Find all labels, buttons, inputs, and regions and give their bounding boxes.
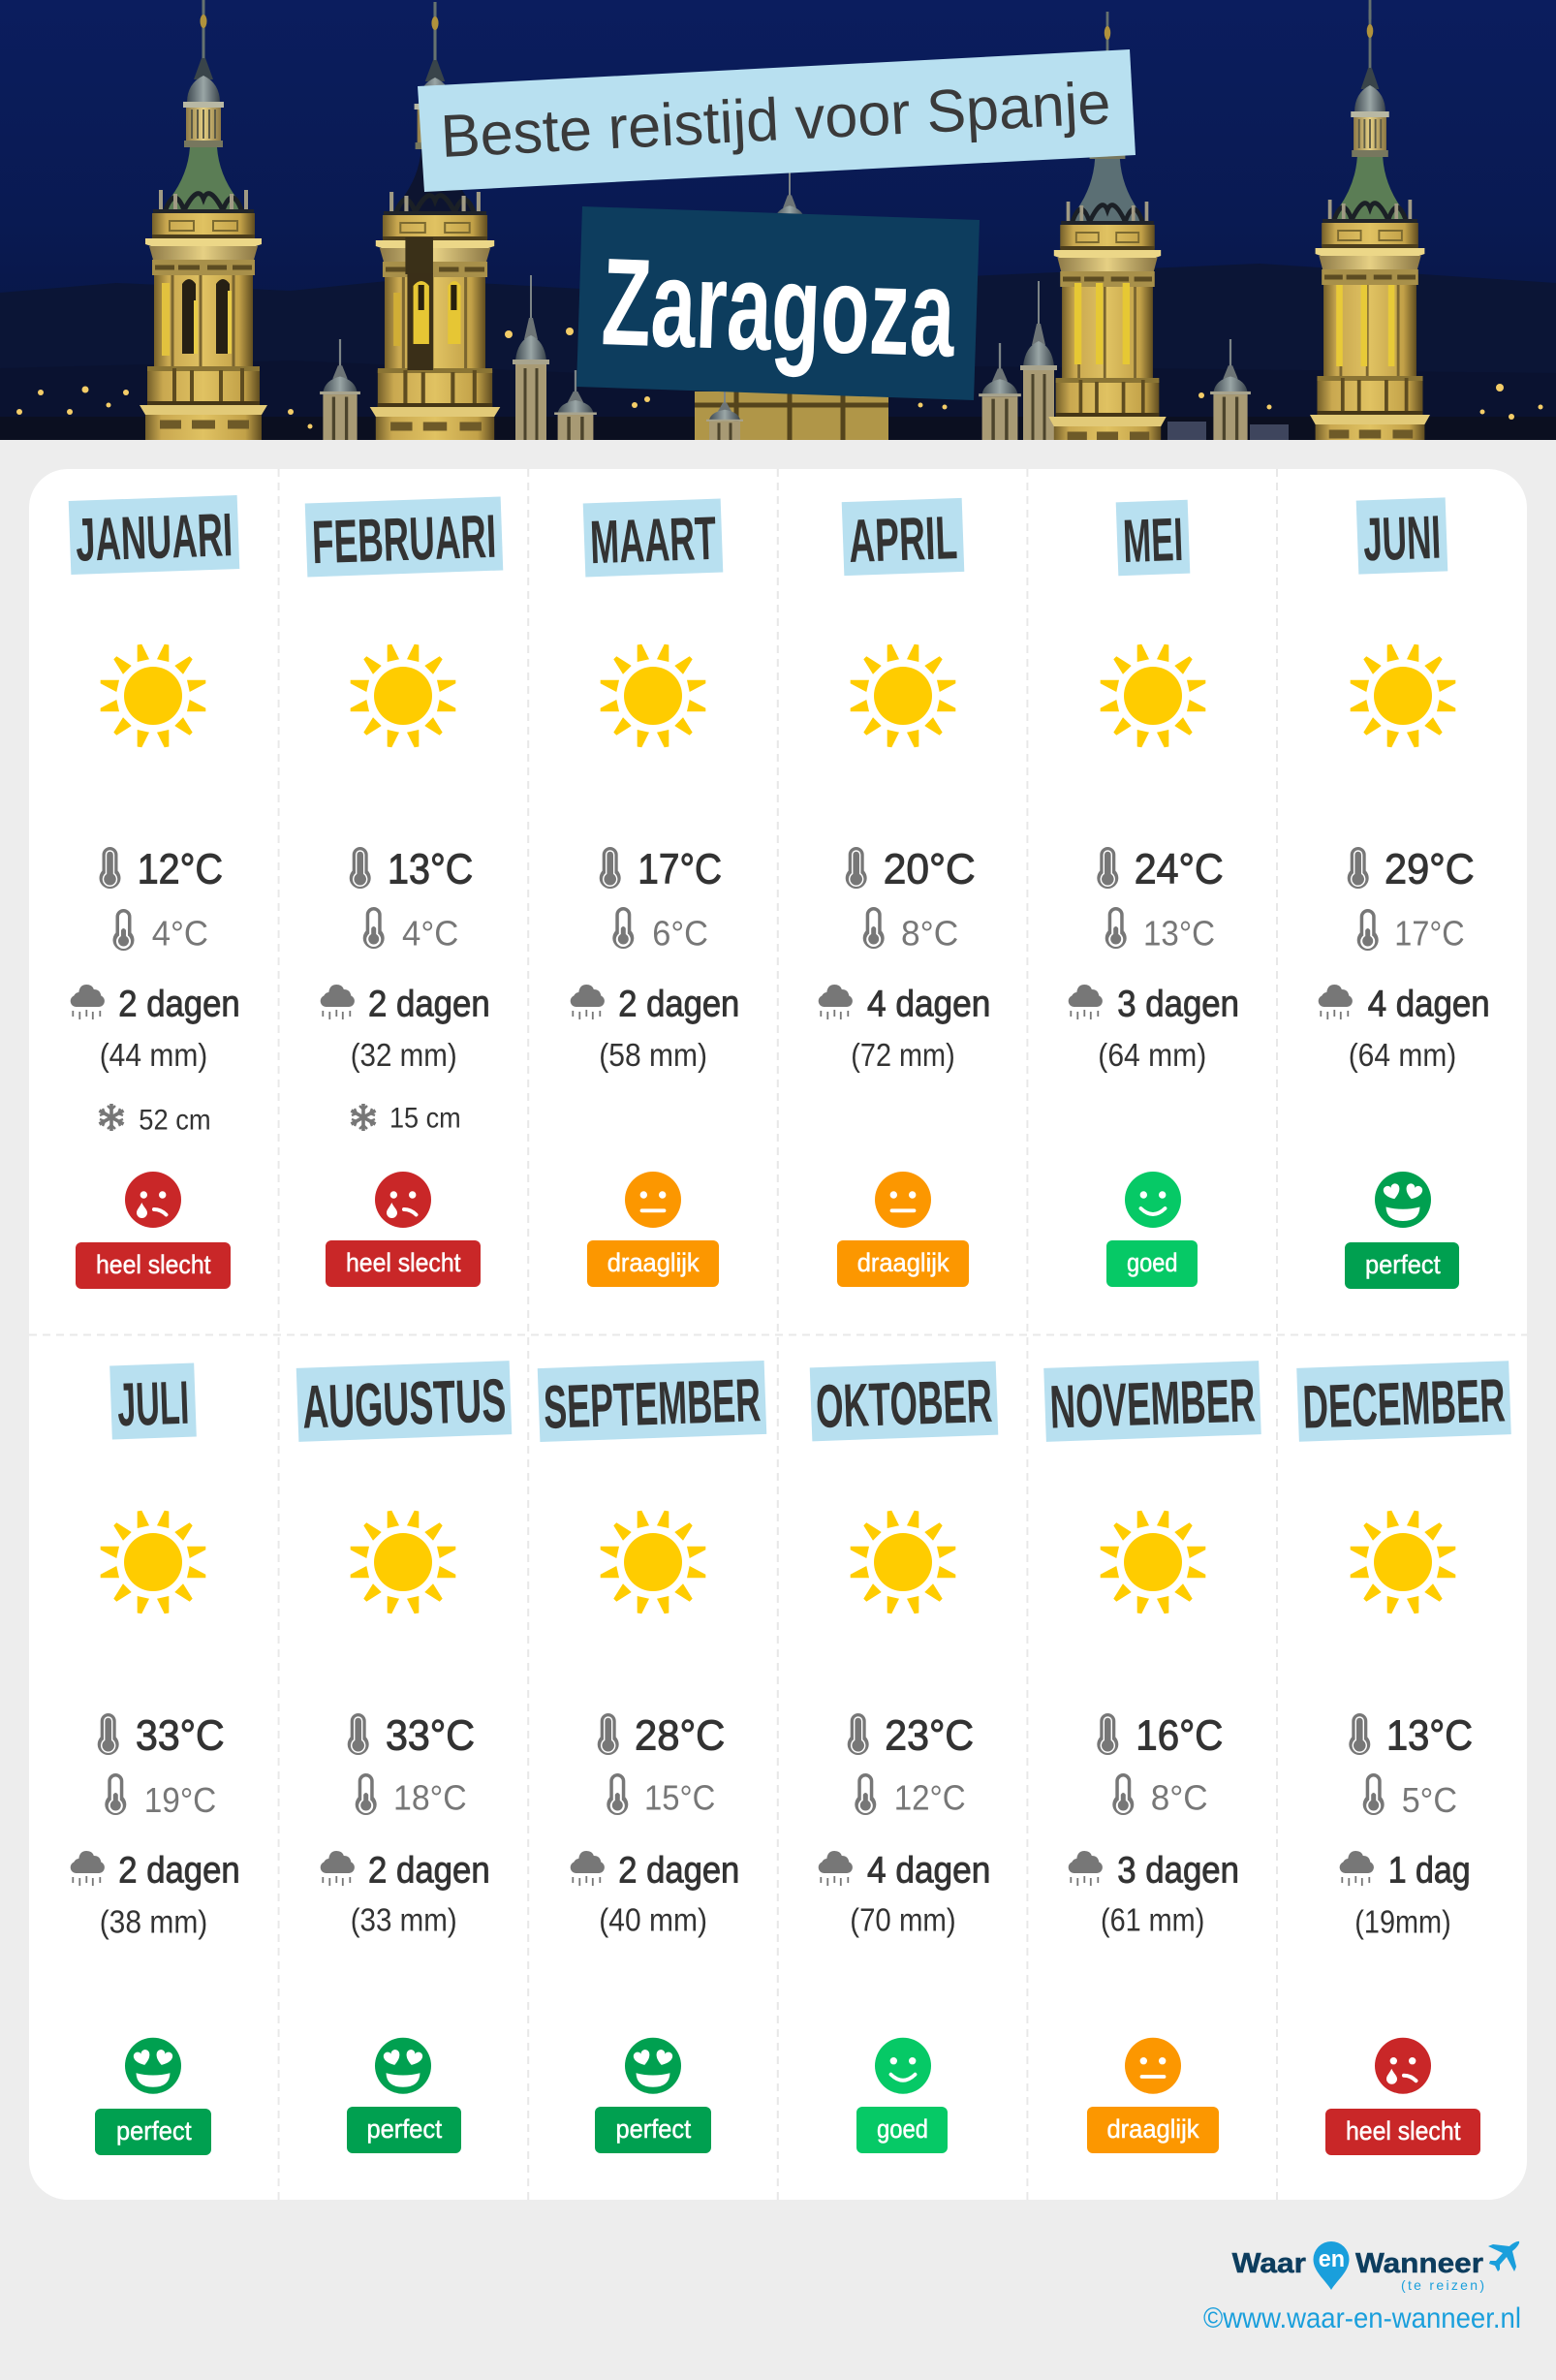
min temperature: 5°C	[1402, 1780, 1457, 1820]
rating: draaglijk: draaglijk	[607, 1248, 700, 1277]
central building	[695, 391, 888, 440]
max temperature: 28°C	[635, 1712, 725, 1760]
logo: Waar en Wanneer: (te reizen)	[1401, 2277, 1484, 2293]
rain days: 2 dagen	[368, 1850, 490, 1891]
month label: SEPTEMBER	[543, 1366, 762, 1442]
rating: draaglijk	[1087, 2038, 1219, 2153]
precipitation: (44 mm)	[100, 1037, 207, 1073]
title banner	[418, 49, 1136, 192]
rating: goed: goed	[877, 2114, 928, 2144]
rain days	[71, 1850, 240, 1891]
max temperature	[846, 846, 976, 893]
month label	[1043, 1361, 1261, 1442]
panel: december	[1296, 1361, 1511, 2155]
rain days	[71, 984, 240, 1024]
rain days: 1 dag	[1388, 1850, 1471, 1891]
rain days: 3 dagen	[1117, 1850, 1239, 1891]
panel: climate table	[29, 469, 1527, 2200]
rating: heel slecht: heel slecht	[346, 1248, 461, 1277]
precipitation: (70 mm)	[850, 1902, 956, 1938]
rating: draaglijk	[837, 1172, 969, 1287]
rating: perfect: perfect	[116, 2116, 192, 2145]
month label	[1116, 500, 1190, 576]
icon: sun	[851, 644, 955, 747]
max temperature: 33°C	[386, 1712, 475, 1760]
rain days: 4 dagen	[867, 1850, 990, 1891]
panel: oktober	[810, 1362, 998, 2153]
max temperature: 29°C	[1385, 846, 1475, 893]
min temperature	[356, 1773, 467, 1818]
month label: MEI	[1122, 506, 1184, 576]
panel: juni	[1319, 497, 1490, 1289]
icon: map pin: en	[1319, 2246, 1345, 2272]
max temperature	[1097, 846, 1224, 893]
min temperature: 19°C	[144, 1780, 216, 1820]
rating: heel slecht	[326, 1172, 481, 1287]
month label	[842, 498, 964, 576]
month label	[109, 1363, 197, 1439]
icon: sun	[101, 1511, 205, 1613]
rating: goed: goed	[1127, 1248, 1178, 1277]
rain days: 2 dagen	[618, 1850, 739, 1891]
min temperature: 8°C	[1151, 1778, 1208, 1818]
precipitation: (64 mm)	[1098, 1037, 1206, 1073]
precipitation: (40 mm)	[599, 1902, 707, 1938]
rating: draaglijk: draaglijk	[1106, 2114, 1199, 2144]
snow: 52 cm	[139, 1105, 211, 1137]
rain days	[571, 984, 739, 1024]
max temperature: 13°C	[388, 846, 473, 893]
min temperature: 6°C	[652, 914, 708, 954]
min temperature: 18°C	[393, 1778, 467, 1818]
panel: februari	[305, 496, 503, 1287]
max temperature	[848, 1712, 974, 1760]
min temperature: 12°C	[894, 1778, 966, 1818]
precipitation: (32 mm)	[351, 1037, 457, 1073]
rain days: 4 dagen	[1368, 984, 1490, 1024]
month label: OKTOBER	[815, 1367, 993, 1441]
month label	[810, 1362, 998, 1441]
min temperature	[863, 907, 958, 954]
rain days	[819, 1850, 990, 1891]
min temperature: 4°C	[152, 914, 208, 954]
icon: sun	[1101, 644, 1205, 747]
rating: perfect	[347, 2038, 461, 2153]
precipitation: (58 mm)	[599, 1037, 707, 1073]
min temperature	[607, 1773, 715, 1818]
max temperature: 17°C	[638, 846, 722, 893]
rating: heel slecht: heel slecht	[96, 1250, 211, 1279]
month label: MAART	[589, 505, 717, 577]
month label: FEBRUARI	[311, 503, 497, 577]
max temperature	[1349, 1712, 1473, 1760]
rating: perfect	[595, 2038, 711, 2153]
month label	[296, 1361, 512, 1442]
max temperature: 23°C	[885, 1712, 974, 1760]
month label	[583, 499, 723, 577]
rating: perfect	[1345, 1172, 1459, 1289]
snow	[99, 1104, 211, 1137]
central spire	[777, 172, 802, 214]
min temperature	[1112, 1773, 1208, 1818]
rain days	[1069, 1850, 1239, 1891]
rating: goed	[1106, 1172, 1198, 1287]
rain days: 2 dagen	[118, 984, 240, 1024]
month label: JULI	[116, 1369, 190, 1439]
panel: april	[819, 498, 990, 1287]
precipitation: (38 mm)	[100, 1903, 207, 1939]
tower 2	[370, 2, 500, 446]
rain days: 2 dagen	[118, 1850, 240, 1891]
icon: sun	[601, 1511, 705, 1613]
min temperature	[112, 909, 208, 954]
icon: map pin	[1314, 2241, 1349, 2290]
small spire	[1020, 281, 1057, 457]
tower 4	[1310, 0, 1430, 454]
rain days	[321, 984, 490, 1024]
icon: sun	[601, 644, 705, 747]
icon: sun	[101, 644, 205, 747]
month label: JANUARI	[75, 501, 233, 575]
logo: Waar en Wanneer: Wanneer	[1355, 2248, 1483, 2279]
min temperature: 8°C	[901, 914, 958, 954]
icon: sun	[1101, 1511, 1205, 1613]
min temperature	[855, 1773, 966, 1818]
small spire	[554, 370, 597, 440]
icon: sun	[1351, 1511, 1455, 1613]
month label	[1356, 497, 1447, 575]
rating: draaglijk: draaglijk	[857, 1248, 949, 1277]
rating: heel slecht: heel slecht	[1346, 2116, 1461, 2145]
rating: perfect	[95, 2038, 211, 2155]
icon: sun	[1351, 644, 1455, 747]
panel: januari	[69, 495, 240, 1289]
panel: maart	[571, 499, 739, 1287]
panel: juli	[71, 1363, 240, 2155]
panel: augustus	[296, 1361, 512, 2153]
city name box: Zaragoza	[600, 233, 957, 384]
tower 3	[1048, 12, 1167, 455]
min temperature	[363, 907, 458, 954]
min temperature	[1363, 1773, 1457, 1820]
small spire	[979, 343, 1021, 449]
rating: heel slecht	[1325, 2038, 1480, 2155]
max temperature	[598, 1712, 725, 1760]
max temperature: 16°C	[1136, 1712, 1223, 1760]
small spire	[1210, 339, 1251, 449]
website url: ©www.waar-en-wanneer.nl	[1203, 2302, 1521, 2334]
max temperature: 12°C	[138, 846, 223, 893]
month label: JUNI	[1362, 504, 1442, 574]
logo: Waar en Wanneer	[1232, 2241, 1519, 2293]
min temperature: 13°C	[1143, 914, 1215, 954]
precipitation: (19mm)	[1354, 1903, 1451, 1939]
icon: airplane	[1488, 2241, 1519, 2271]
max temperature: 20°C	[884, 846, 976, 893]
rating: heel slecht	[76, 1172, 231, 1289]
rain days: 4 dagen	[867, 984, 990, 1024]
rating: perfect: perfect	[616, 2114, 692, 2144]
title banner: Beste reistijd voor Spanje	[439, 70, 1112, 171]
min temperature	[1105, 907, 1215, 954]
precipitation: (61 mm)	[1101, 1902, 1204, 1938]
max temperature	[98, 1712, 225, 1760]
rain days	[321, 1850, 490, 1891]
icon: sun	[351, 644, 455, 747]
snow	[351, 1102, 461, 1134]
max temperature	[348, 1712, 475, 1760]
small spire	[513, 275, 549, 452]
max temperature	[99, 846, 223, 893]
max temperature	[600, 846, 722, 893]
max temperature	[350, 846, 473, 893]
min temperature	[105, 1773, 216, 1820]
min temperature	[612, 907, 708, 954]
month label: AUGUSTUS	[301, 1366, 507, 1442]
max temperature	[1097, 1712, 1223, 1760]
rain days	[1340, 1850, 1471, 1891]
rain days	[1319, 984, 1490, 1024]
max temperature: 24°C	[1135, 846, 1224, 893]
rain days	[819, 984, 990, 1024]
month label: APRIL	[848, 504, 958, 576]
rain days: 2 dagen	[368, 984, 490, 1024]
rating: goed	[856, 2038, 948, 2153]
panel: september	[538, 1361, 766, 2153]
max temperature: 33°C	[136, 1712, 225, 1760]
city name box	[576, 206, 980, 400]
header photo: basilica towers at night	[0, 0, 1556, 458]
icon: sun	[351, 1511, 455, 1613]
rain days: 2 dagen	[618, 984, 739, 1024]
month label	[538, 1361, 766, 1442]
precipitation: (33 mm)	[351, 1902, 457, 1938]
rain days: 3 dagen	[1117, 984, 1239, 1024]
month label: NOVEMBER	[1048, 1366, 1257, 1442]
rain days	[1069, 984, 1239, 1024]
rating: perfect: perfect	[366, 2114, 443, 2144]
small spire	[320, 339, 360, 449]
rating: perfect: perfect	[1365, 1250, 1441, 1279]
max temperature: 13°C	[1386, 1712, 1473, 1760]
panel: november	[1043, 1361, 1261, 2153]
min temperature	[1357, 909, 1465, 954]
min temperature: 4°C	[402, 914, 458, 954]
rating: draaglijk	[587, 1172, 719, 1287]
min temperature: 15°C	[644, 1778, 715, 1818]
month label	[305, 496, 503, 578]
min temperature: 17°C	[1394, 914, 1465, 954]
max temperature	[1348, 846, 1475, 893]
rain days	[571, 1850, 739, 1891]
month label	[69, 495, 239, 575]
logo: Waar en Wanneer: Waar	[1232, 2248, 1306, 2279]
tower 1	[140, 0, 267, 444]
snow: 15 cm	[389, 1102, 461, 1134]
precipitation: (64 mm)	[1349, 1037, 1456, 1073]
panel: mei	[1069, 500, 1239, 1287]
icon: sun	[851, 1511, 955, 1613]
small spire	[706, 391, 743, 440]
precipitation: (72 mm)	[851, 1037, 955, 1073]
